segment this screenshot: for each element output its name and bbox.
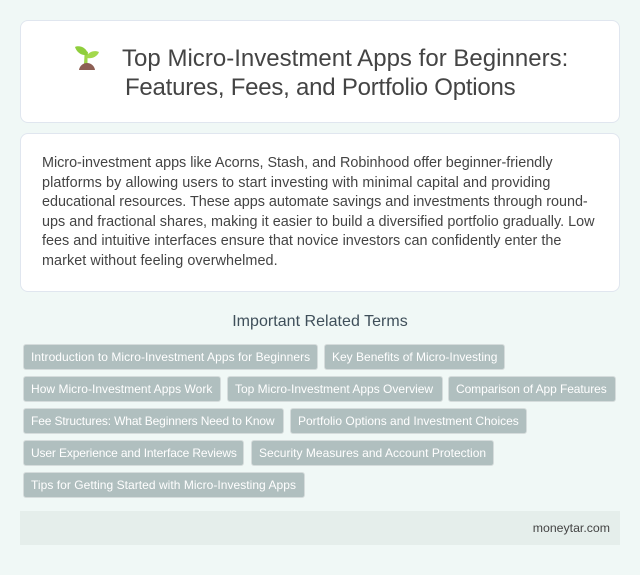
footer site name: moneytar.com — [533, 521, 610, 535]
header panel — [20, 20, 620, 123]
tag — [23, 344, 318, 370]
paragraph: market without feeling overwhelmed. — [42, 253, 278, 269]
tag — [290, 408, 527, 434]
title — [122, 45, 568, 101]
related terms tags — [23, 344, 616, 498]
paragraph: educational resources. These apps automate savings and investments through round- — [42, 194, 588, 210]
tag: Fee Structures: What Beginners Need to Know — [31, 414, 274, 428]
tag — [23, 376, 221, 402]
tag: Top Micro-Investment Apps Overview — [235, 382, 433, 396]
tag — [448, 376, 616, 402]
tag — [227, 376, 443, 402]
tag: Tips for Getting Started with Micro-Investing Apps — [31, 478, 296, 492]
paragraph: ups and fractional shares, making it easier to build a diversified portfolio gradually. Low — [42, 214, 595, 230]
tag — [251, 440, 494, 466]
tag: Introduction to Micro-Investment Apps for Beginners — [31, 350, 310, 364]
tag: Security Measures and Account Protection — [259, 446, 486, 460]
paragraph: Micro-investment apps like Acorns, Stash, and Robinhood offer beginner-friendly — [42, 155, 553, 171]
paragraph: platforms by allowing users to start investing with minimal capital and providing — [42, 175, 550, 191]
tag — [23, 408, 284, 434]
tag — [23, 472, 305, 498]
section heading: Important Related Terms — [232, 313, 408, 330]
tag: Key Benefits of Micro-Investing — [332, 350, 497, 364]
tag — [23, 440, 244, 466]
tag: Portfolio Options and Investment Choices — [298, 414, 519, 428]
title: Features, Fees, and Portfolio Options — [125, 74, 515, 101]
tag: User Experience and Interface Reviews — [31, 446, 237, 460]
footer bar — [20, 511, 620, 545]
paragraph — [42, 155, 595, 269]
tag: How Micro-Investment Apps Work — [31, 382, 212, 396]
tag: Comparison of App Features — [456, 382, 607, 396]
icon: seedling — [75, 46, 99, 70]
paragraph: fees and intuitive interfaces ensure that novice investors can confidently enter the — [42, 233, 561, 249]
intro text panel — [20, 133, 620, 292]
tag — [324, 344, 505, 370]
title: Top Micro-Investment Apps for Beginners: — [122, 45, 568, 72]
